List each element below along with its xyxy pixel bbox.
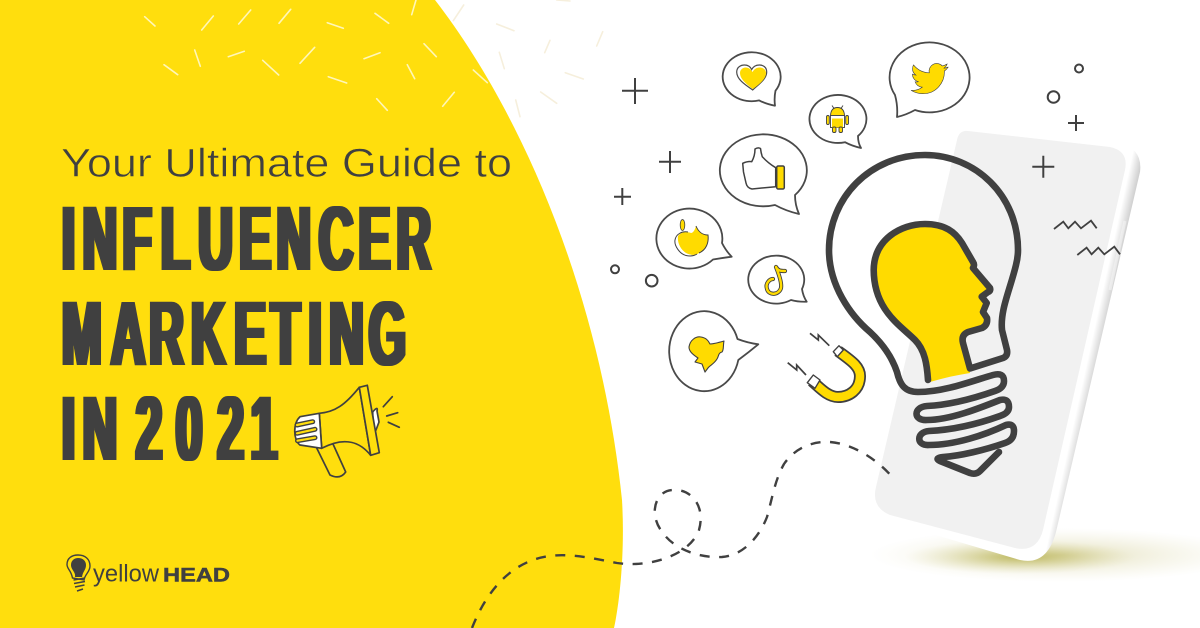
- icon: twitter bird: [911, 63, 948, 94]
- icon: tiktok note: [767, 267, 785, 294]
- light bulb with head silhouette: [829, 155, 1018, 474]
- icon: snapchat ghost: [689, 337, 724, 372]
- phone: [871, 128, 1140, 561]
- logo: yellowHEAD: [67, 555, 230, 591]
- phone shadow: [870, 528, 1200, 582]
- heading line 2: MARKETING: [62, 282, 406, 385]
- dashed flight path: [472, 442, 893, 628]
- yellow background shape: [0, 0, 623, 628]
- heading: [62, 187, 431, 480]
- plus and circle accents: [611, 64, 1084, 287]
- speech bubble: android: [809, 95, 866, 148]
- icon: megaphone: [295, 385, 399, 477]
- subtitle: Your Ultimate Guide to: [61, 142, 512, 186]
- logo: yellowHEAD: HEAD: [163, 564, 230, 586]
- wave marks: [1054, 221, 1120, 255]
- heading line 3: IN 2021: [62, 377, 277, 480]
- phone body: [871, 128, 1140, 561]
- logo wordmark: yellow: [93, 560, 160, 588]
- icon: apple: [675, 220, 708, 256]
- plus left medium: [659, 151, 681, 173]
- heading line 1: INFLUENCER: [62, 187, 431, 290]
- small circles: [611, 265, 619, 273]
- speech bubble: heart: [723, 52, 781, 106]
- speech bubble: tiktok: [748, 256, 807, 304]
- icon: thumbs up: [743, 148, 784, 189]
- head fill: [874, 224, 990, 382]
- plus on screen: [1032, 156, 1054, 178]
- icon: magnet: [788, 333, 860, 397]
- logo bulb icon: [67, 555, 90, 591]
- confetti dashes: [145, 0, 603, 117]
- speech bubble: thumbs up: [720, 134, 807, 214]
- bulb outline and screw thread: [829, 155, 1018, 474]
- plus left large: [622, 78, 648, 104]
- speech bubble: apple: [656, 209, 732, 269]
- phone screen: [875, 131, 1126, 549]
- icon: android: [826, 106, 848, 132]
- icon: heart: [737, 65, 767, 90]
- plus left small: [614, 188, 631, 205]
- speech bubble: twitter: [890, 42, 970, 117]
- speech bubble: snapchat: [669, 311, 758, 391]
- plus right small: [1068, 115, 1084, 131]
